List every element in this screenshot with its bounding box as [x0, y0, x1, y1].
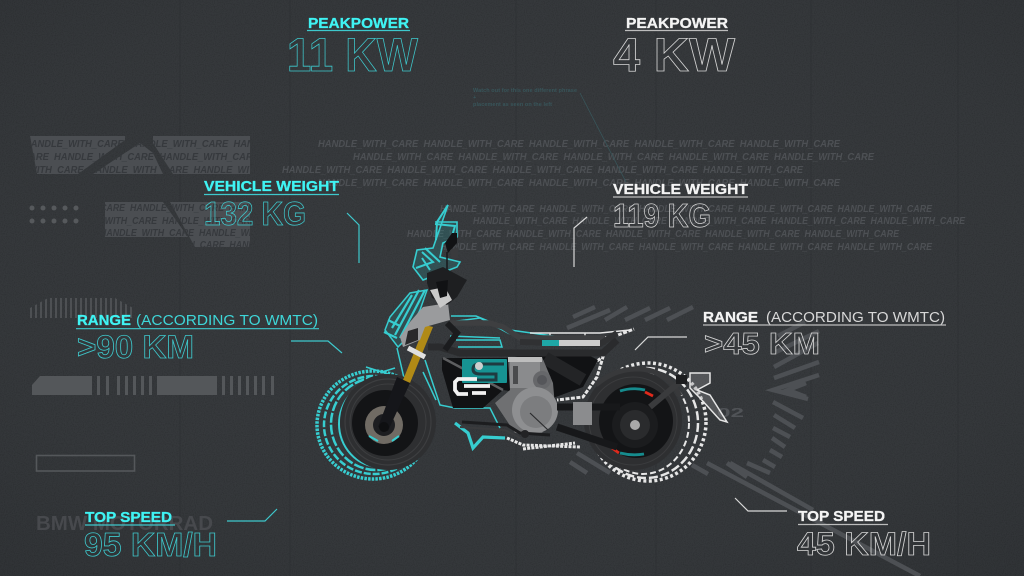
ghost front wheel outline, cyan: [317, 371, 429, 479]
ghost handlebar and front wireframe, cyan: [366, 205, 560, 448]
main frame body: [428, 323, 617, 408]
stat: top speed, smaller model: TOP SPEED: [798, 508, 885, 525]
stat: top speed, smaller model: [797, 508, 931, 562]
stat: top speed, smaller model: 45 KM/H: [797, 526, 931, 562]
seat colour accent: [542, 340, 600, 346]
decorative repeated text: upper block: HANDLE_WITH_CARE HANDLE_WITH_CARE HANDLE_WITH_CARE HANDLE_WITH_CARE HANDLE_WITH_CARE: [353, 152, 874, 163]
decorative cut-out panels with text: HANDLE_WITH_CARE HANDLE_WITH_CARE HANDLE_WITH_CARE: [31, 203, 323, 214]
stat: vehicle weight, smaller model: [613, 181, 748, 234]
footrest and stand: [460, 422, 550, 438]
stat: range, larger model: (ACCORDING TO WMTC): [136, 312, 318, 329]
decorative cut-out panels with text: [30, 136, 250, 247]
stat: top speed, larger model: 95 KM/H: [84, 526, 217, 563]
decorative barcode strip: [32, 376, 274, 395]
stat: vehicle weight, smaller model: VEHICLE WEIGHT: [613, 181, 748, 198]
decorative repeated text: lower block: HANDLE_WITH_CARE HANDLE_WITH_CARE HANDLE_WITH_CARE HANDLE_WITH_CARE HANDLE_WITH_CARE: [440, 242, 932, 253]
faint annotation note: Watch out for this one different phrase: [473, 88, 577, 94]
stat: peak power, larger model: 11 KW: [287, 28, 419, 81]
decorative repeated text: lower block: HANDLE_WITH_CARE HANDLE_WITH_CARE HANDLE_WITH_CARE HANDLE_WITH_CARE HANDLE_WITH_CARE: [473, 216, 965, 227]
stat: range, smaller model: RANGE: [703, 309, 758, 326]
CE side logo: [455, 379, 490, 394]
decorative arched bars: [31, 298, 131, 318]
stat: top speed, larger model: TOP SPEED: [85, 509, 172, 526]
rear fender and shock: [596, 369, 687, 407]
decorative cut-out panels with text: HANDLE_WITH_CARE HANDLE_WITH_CARE HANDLE_WITH_CARE: [63, 216, 355, 227]
stat: range, smaller model: [703, 309, 946, 361]
decorative dots grid: [30, 206, 78, 224]
leader line: range, cyan: [291, 341, 342, 353]
stat: vehicle weight, larger model: 132 KG: [204, 195, 306, 232]
electric motor: [495, 357, 558, 435]
decorative cut-out panels with text: HANDLE_WITH_CARE HANDLE_WITH_CARE HANDLE_WITH_CARE: [100, 228, 392, 239]
rear wheel: [584, 370, 682, 470]
decorative cut-out panels with text: HANDLE_WITH_CARE HANDLE_WITH_CARE HANDLE_WITH_CARE: [24, 139, 333, 150]
faint annotation note: placement as seen on the left: [473, 102, 552, 108]
decorative repeated text: upper block: HANDLE_WITH_CARE HANDLE_WITH_CARE HANDLE_WITH_CARE HANDLE_WITH_CARE HANDLE_WITH_CARE: [318, 178, 840, 189]
decorative repeated text: lower block: [407, 204, 965, 253]
decorative repeated text: upper block: [282, 139, 874, 189]
ghost rear frame, rack and tail, white: [507, 329, 727, 449]
decorative diagonal stripes: [567, 307, 920, 576]
stat: range, larger model: >90 KM: [77, 329, 194, 365]
leader line: range, white: [635, 337, 687, 350]
stat: vehicle weight, larger model: VEHICLE WEIGHT: [204, 178, 339, 195]
front fork: [378, 303, 450, 432]
decorative repeated text: upper block: HANDLE_WITH_CARE HANDLE_WITH_CARE HANDLE_WITH_CARE HANDLE_WITH_CARE HANDLE_WITH_CARE: [282, 165, 803, 176]
ghost rear wheel outline, white: [590, 363, 706, 481]
swingarm and belt: [557, 402, 620, 447]
stat: range, larger model: [76, 312, 319, 365]
stat: range, smaller model: >45 KM: [704, 326, 820, 361]
decorative diagonal stripes: 02: [717, 405, 744, 420]
stat: peak power, smaller model: PEAKPOWER: [626, 15, 728, 32]
decorative repeated text: lower block: HANDLE_WITH_CARE HANDLE_WITH_CARE HANDLE_WITH_CARE HANDLE_WITH_CARE HANDLE_WITH_CARE: [440, 204, 932, 215]
teal side badge: [462, 359, 507, 383]
leader line: top speed, cyan: [227, 509, 277, 521]
leader line: weight, cyan: [347, 213, 359, 263]
stat: top speed, larger model: [84, 509, 217, 563]
stat: range, smaller model: (ACCORDING TO WMTC): [766, 309, 945, 326]
stat: peak power, smaller model: 4 KW: [613, 28, 736, 81]
faint annotation note: [473, 88, 626, 182]
faint annotation note: +: [473, 95, 476, 101]
faded brand text: BMW MOTORRAD: [36, 513, 213, 535]
stat: vehicle weight, larger model: [204, 178, 339, 232]
stat: vehicle weight, smaller model: 119 KG: [613, 197, 711, 234]
stat: peak power, larger model: PEAKPOWER: [308, 15, 409, 32]
leader line: weight, white: [574, 217, 587, 267]
handlebar and mirror: [427, 233, 467, 308]
decorative repeated text: upper block: HANDLE_WITH_CARE HANDLE_WITH_CARE HANDLE_WITH_CARE HANDLE_WITH_CARE HANDLE_WITH_CARE: [318, 139, 840, 150]
decorative outlined rectangle: [36, 456, 134, 471]
leader line: top speed, white: [735, 498, 787, 511]
decorative repeated text: lower block: HANDLE_WITH_CARE HANDLE_WITH_CARE HANDLE_WITH_CARE HANDLE_WITH_CARE HANDLE_WITH_CARE: [407, 229, 899, 240]
front wheel: [340, 374, 436, 470]
motorcycle: [317, 205, 727, 481]
decorative cut-out panels with text: HANDLE_WITH_CARE HANDLE_WITH_CARE: [131, 240, 323, 251]
stat: range, larger model: RANGE: [77, 312, 131, 329]
